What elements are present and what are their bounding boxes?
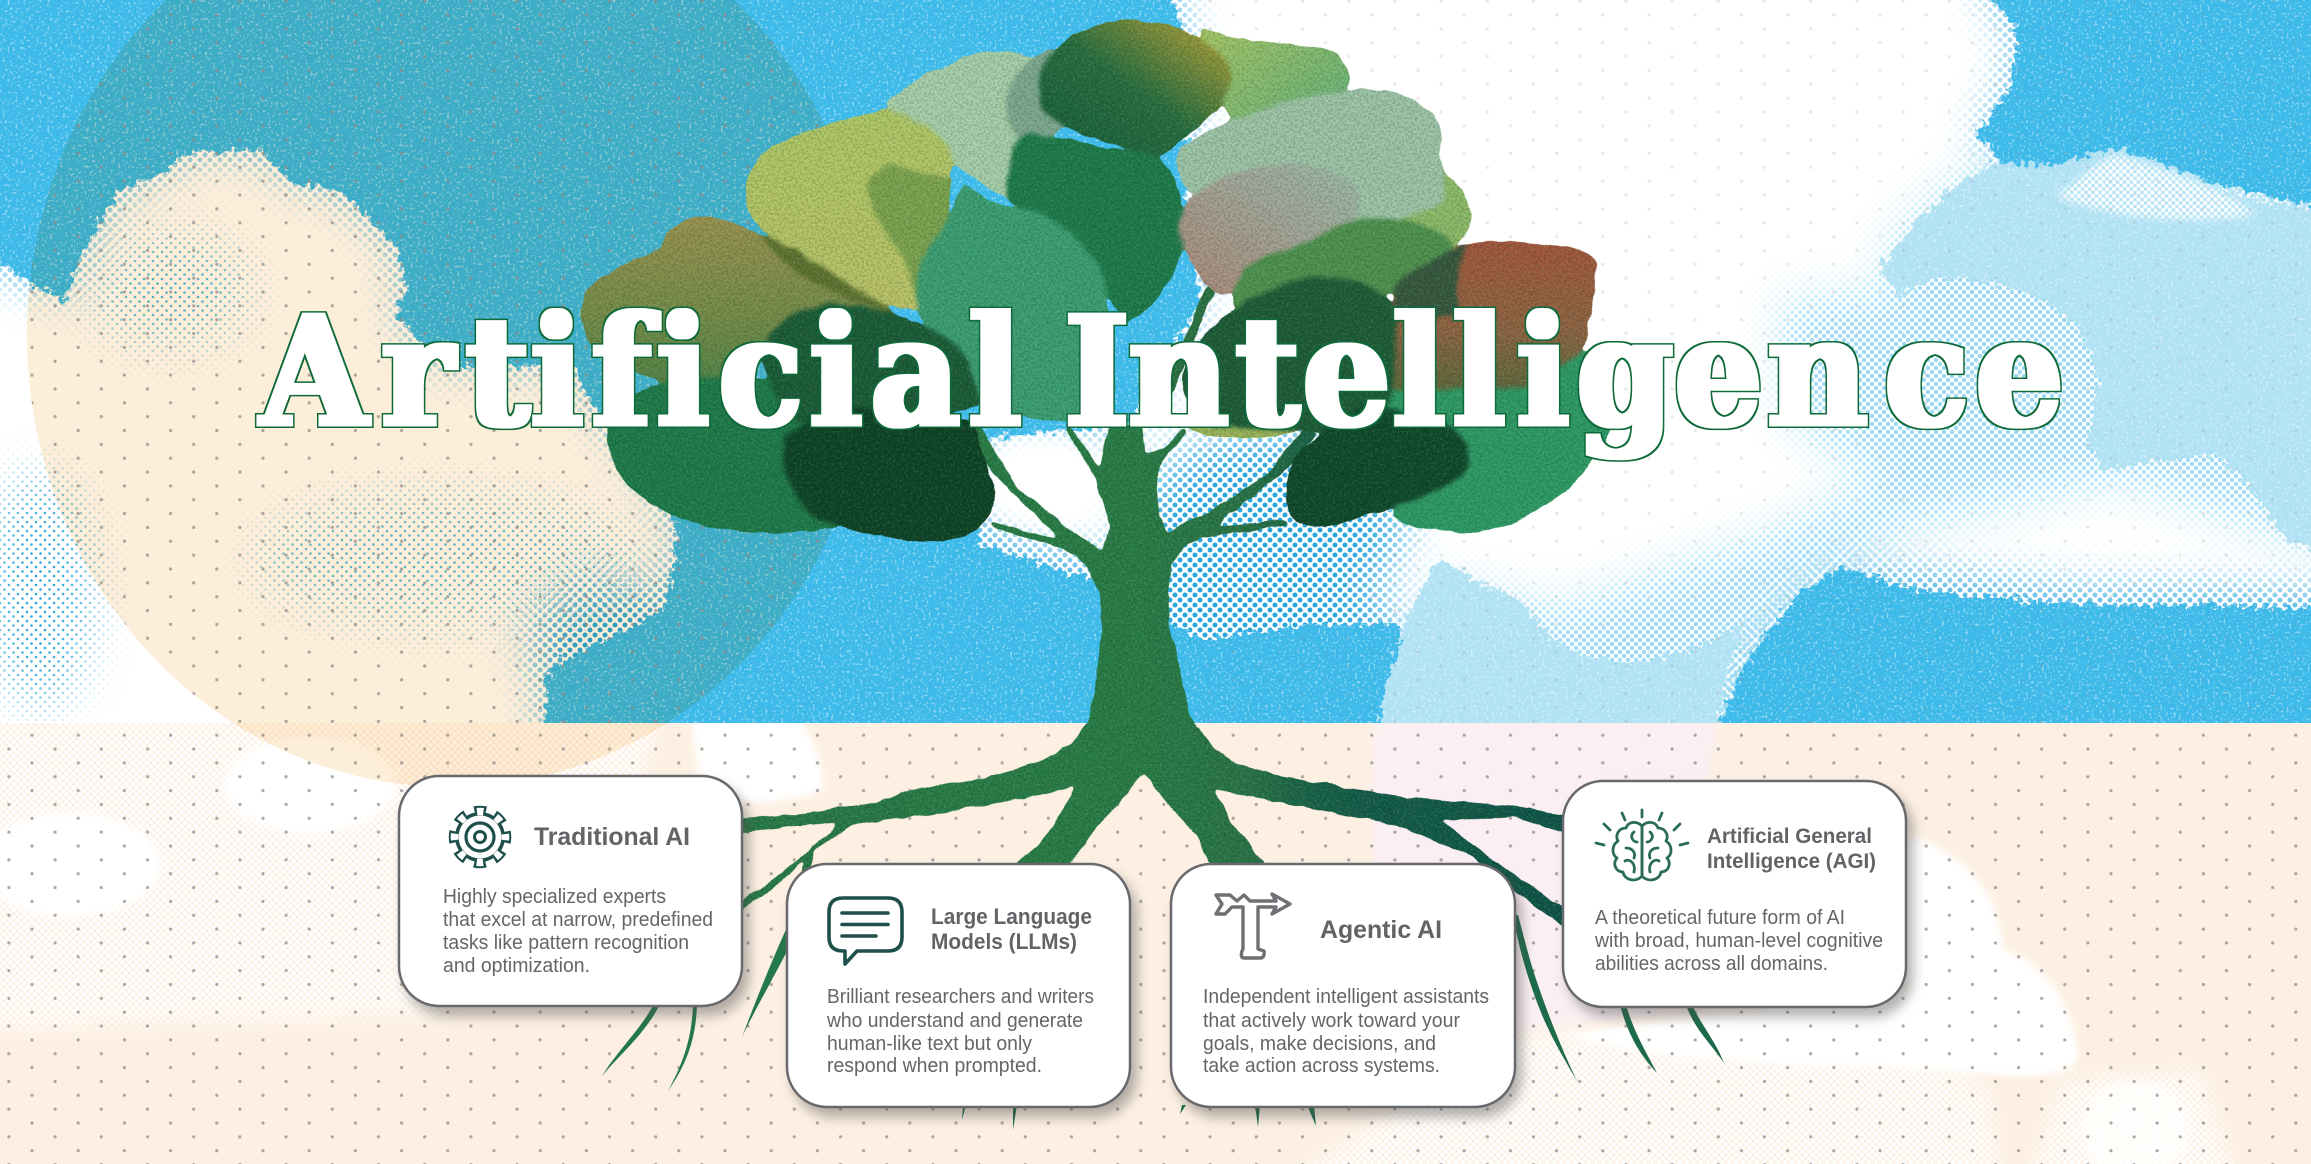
leaf: rosy grey [1179, 164, 1360, 296]
background: soil band [0, 700, 2311, 1164]
leaf: grey green back [1006, 46, 1083, 150]
card body: that actively work toward your [1203, 1010, 1460, 1032]
leaf: dark olive stripe [760, 236, 897, 312]
leaf: darkest left [783, 404, 995, 543]
leaf: top right light green [1200, 29, 1349, 141]
leaf: mid green [1234, 218, 1452, 307]
card heading: Artificial General [1707, 825, 1872, 848]
card: Large Language Models [787, 864, 1130, 1107]
leaf: pale sage back [884, 52, 1039, 204]
right root [1395, 796, 1566, 928]
card body: goals, make decisions, and [1203, 1033, 1436, 1055]
tree trunk and roots [740, 284, 1566, 950]
card body: Brilliant researchers and writers [827, 986, 1094, 1008]
pale blue washes [1377, 148, 2311, 760]
card heading [931, 904, 1092, 954]
leaf: right sage [1177, 89, 1446, 229]
white gap below canopy [980, 435, 1100, 525]
icon: brain with rays [1596, 810, 1688, 880]
big cream circle [27, 0, 873, 787]
leaf: dark over red [1393, 244, 1468, 321]
leaf: olive left [581, 216, 884, 393]
left root [740, 792, 905, 950]
card body: Independent intelligent assistants [1203, 986, 1489, 1008]
card body [443, 886, 713, 977]
leaf: big yellow green [745, 109, 953, 311]
leaf: right light green edge [1386, 161, 1471, 248]
icon: signpost [1216, 894, 1290, 958]
canopy branches [1162, 284, 1216, 398]
icon: speech bubble [829, 898, 902, 964]
leaf: lower right green [1386, 350, 1614, 532]
pink wash [1372, 715, 1719, 1040]
trunk [900, 427, 1400, 867]
leaf: dark right centre [1182, 277, 1397, 432]
card body: and optimization. [443, 955, 590, 977]
card body: that excel at narrow, predefined [443, 909, 713, 931]
background: sky [0, 0, 2311, 760]
card body: A theoretical future form of AI [1595, 907, 1845, 929]
leaf: olive sliver under title [1180, 427, 1311, 438]
card body: with broad, human-level cognitive [1594, 930, 1883, 952]
title: Artificial Intelligence [259, 283, 2063, 462]
leaf: teal centre [917, 182, 1114, 421]
leaf: dark green upper left [760, 304, 980, 429]
leaf: top dark olive [1039, 20, 1231, 157]
card body: Highly specialized experts [443, 886, 666, 908]
halftone white cloud [0, 723, 2311, 1164]
card: Traditional AI [399, 776, 742, 1006]
icon: gear [452, 810, 508, 864]
thin root tips [602, 915, 1724, 1130]
card body [1203, 986, 1489, 1077]
white clouds in soil band [0, 700, 2190, 1164]
sky blue washes [0, 0, 2311, 760]
tree canopy [581, 20, 1614, 543]
card heading: Models (LLMs) [931, 929, 1077, 954]
card heading: Traditional AI [534, 823, 690, 851]
leaf: green lower left [606, 377, 973, 533]
halftone cloud edges [0, 0, 2311, 723]
card: Artificial General Intelligence [1563, 781, 1906, 1007]
card body: abilities across all domains. [1595, 953, 1828, 975]
card body: human-like text but only [827, 1033, 1032, 1055]
card body: take action across systems. [1203, 1055, 1440, 1077]
card heading [1707, 825, 1876, 873]
leaf: darkest right [1286, 404, 1469, 527]
card body: tasks like pattern recognition [443, 932, 689, 954]
leaf: inner olive [869, 162, 953, 307]
leaf: red brown [1393, 242, 1596, 404]
card body [826, 986, 1094, 1077]
leaf: center tall green [1008, 132, 1183, 325]
card heading: Intelligence (AGI) [1707, 850, 1876, 873]
card body [1594, 907, 1883, 975]
card heading: Agentic AI [1320, 916, 1442, 944]
card body: respond when prompted. [827, 1055, 1042, 1077]
card: Agentic AI [1171, 864, 1515, 1107]
card heading: Large Language [931, 904, 1092, 929]
white cloud crest in pale wash [2054, 149, 2257, 224]
card body: who understand and generate [826, 1010, 1083, 1032]
